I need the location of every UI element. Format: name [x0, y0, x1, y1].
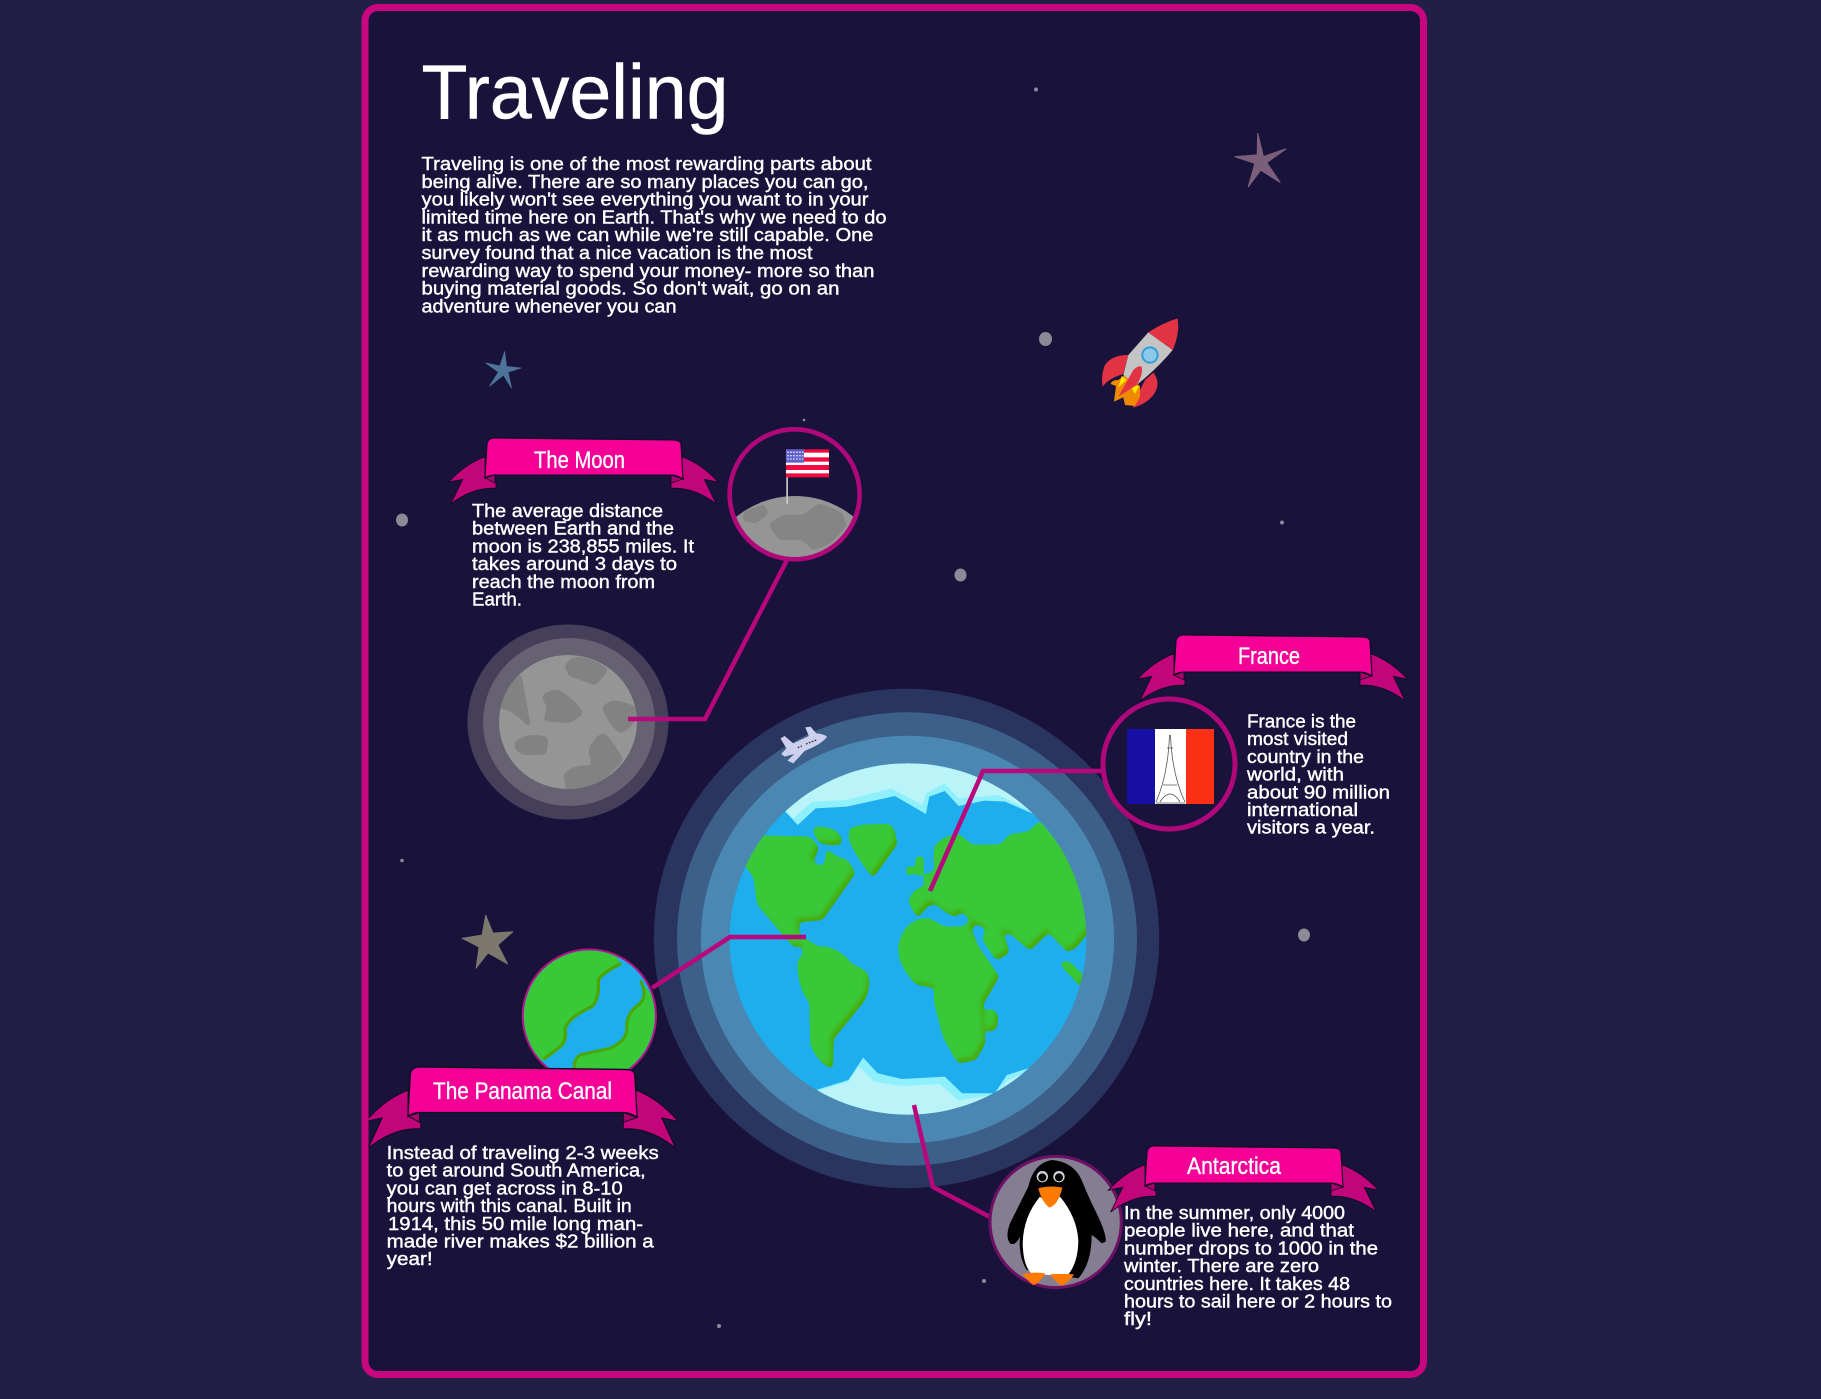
ribbon label: France: France — [1238, 643, 1300, 670]
ribbon: The Panama Canal — [366, 1067, 678, 1148]
globe map — [730, 747, 1094, 1127]
text: Antarctica fact: people live here, and that — [1124, 1220, 1354, 1241]
intro text block: you likely won't see everything you want to in your — [422, 189, 868, 210]
text: moon fact: moon is 238,855 miles. It — [472, 535, 694, 556]
circle: French flag with Eiffel Tower — [1103, 699, 1235, 829]
text: Antarctica fact: hours to sail here or 2 hours to — [1124, 1290, 1392, 1312]
text: Panama Canal fact: to get around South America, — [387, 1160, 646, 1181]
infographic canvas — [362, 4, 1427, 1378]
text: France fact: country in the — [1247, 746, 1364, 767]
text: Panama Canal fact: 1914, this 50 mile long man- — [388, 1213, 643, 1234]
intro text block: limited time here on Earth. That's why we need to do — [422, 206, 886, 227]
earth — [654, 689, 1159, 1188]
ribbon label: Antarctica: Antarctica — [1187, 1153, 1281, 1180]
connector line: Antarctica — [914, 1105, 990, 1217]
ribbon: The Moon — [448, 438, 719, 504]
text: Antarctica fact: number drops to 1000 in the — [1124, 1237, 1378, 1258]
text: Panama Canal fact: year! — [387, 1248, 433, 1269]
text: Antarctica fact: countries here. It takes 48 — [1124, 1273, 1350, 1294]
pink frame — [365, 8, 1424, 1374]
text: moon fact: The average distance — [472, 500, 663, 521]
text: Panama Canal fact: Instead of traveling 2-3 weeks — [387, 1142, 659, 1163]
intro text block: buying material goods. So don't wait, go on an — [422, 278, 840, 299]
connector line: France — [930, 771, 1103, 891]
circle: penguin — [990, 1156, 1121, 1288]
text: moon fact: takes around 3 days to — [472, 553, 677, 574]
panel: Antarctica — [914, 1105, 1392, 1329]
star: blue — [486, 352, 521, 388]
dots — [396, 88, 1310, 1328]
atmosphere rings — [654, 689, 1159, 1188]
intro text block: Traveling is one of the most rewarding parts about — [422, 153, 872, 174]
intro text block: adventure whenever you can — [422, 295, 676, 316]
text: France fact — [1246, 710, 1390, 838]
panel background — [365, 8, 1424, 1374]
intro text block: rewarding way to spend your money- more so than — [422, 260, 874, 281]
circle: moon landing with flag — [727, 427, 862, 562]
moon planet — [468, 624, 668, 820]
text: Panama Canal fact — [387, 1142, 659, 1269]
text: moon fact: Earth. — [472, 588, 522, 610]
icon: airplane — [781, 727, 827, 763]
background stars and dots — [396, 88, 1310, 1328]
text: Antarctica fact: fly! — [1124, 1308, 1152, 1329]
ribbon label: The Moon: The Moon — [534, 447, 625, 474]
panel: France — [930, 635, 1408, 891]
text: Panama Canal fact: made river makes $2 billion a — [387, 1230, 654, 1252]
connector line: Panama — [652, 937, 806, 988]
text: Panama Canal fact: hours with this canal. Built in — [387, 1195, 632, 1216]
title: Traveling — [422, 50, 728, 136]
text: moon fact: reach the moon from — [472, 571, 655, 592]
star: grey — [462, 915, 513, 968]
text: France fact: France is the — [1247, 710, 1356, 732]
text: France fact: most visited — [1247, 728, 1348, 749]
intro text block: it as much as we can while we're still capable. One — [422, 224, 874, 245]
panel: The Moon — [448, 429, 888, 820]
text: France fact: international — [1247, 799, 1358, 820]
text: France fact: world, with — [1246, 764, 1344, 785]
ribbon label: The Panama Canal: The Panama Canal — [433, 1078, 612, 1105]
text: Antarctica fact — [1123, 1202, 1392, 1329]
text: moon fact: between Earth and the — [472, 518, 674, 539]
star: top right — [1235, 133, 1286, 187]
connector line: moon — [628, 560, 787, 719]
panel: The Panama Canal — [366, 937, 806, 1269]
text: France fact: about 90 million — [1247, 781, 1390, 802]
intro text block: being alive. There are so many places you can go, — [422, 171, 868, 192]
ribbon: Antarctica — [1108, 1146, 1379, 1212]
text: Antarctica fact: winter. There are zero — [1123, 1255, 1319, 1276]
intro text block: survey found that a nice vacation is the most — [422, 242, 812, 263]
ribbon: France — [1137, 635, 1408, 701]
text: France fact: visitors a year. — [1247, 817, 1375, 838]
icon: rocket — [1102, 318, 1178, 408]
text: Antarctica fact: In the summer, only 4000 — [1124, 1202, 1345, 1223]
intro text block — [422, 153, 886, 316]
circle: canal globe — [522, 948, 657, 1070]
text: Panama Canal fact: you can get across in 8-10 — [387, 1177, 623, 1198]
text: moon fact — [472, 500, 694, 610]
